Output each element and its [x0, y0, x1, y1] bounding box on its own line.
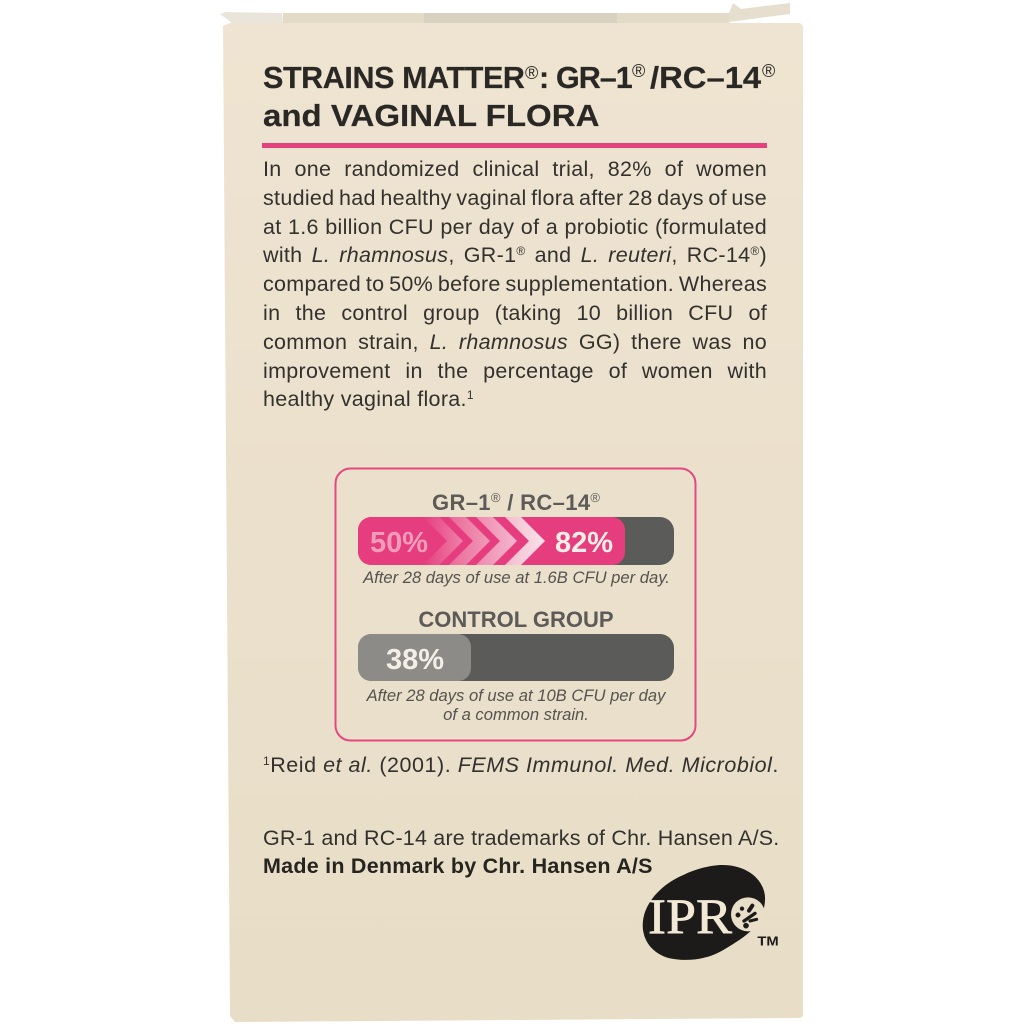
caption: GR-1 / RC-14: After 28 days of use at 1.6B CFU per day. [362, 568, 670, 587]
bar: GR-1 / RC-14 82% [358, 517, 674, 565]
caption: control group: After 28 days of use at 10B CFU per day [366, 686, 667, 705]
heading: ® [632, 61, 645, 81]
body paragraph: compared to 50% before supplementation. Whereas [263, 272, 767, 296]
body paragraph: at 1.6 billion CFU per day of a probiotic (formulated [263, 215, 767, 239]
body paragraph: with L. rhamnosus, GR-1® and L. reuteri, RC-14®) [263, 243, 767, 267]
body paragraph: studied had healthy vaginal flora after 28 days of use [263, 186, 767, 210]
heading: : [539, 61, 549, 95]
heading: /RC–14 [650, 61, 761, 95]
body paragraph [263, 157, 767, 411]
label: GR-1 / RC-14: ® [491, 490, 501, 505]
heading: and VAGINAL FLORA [263, 99, 599, 133]
caption: control group: of a common strain. [443, 705, 589, 724]
label: GR-1 / RC-14: / RC–14 [501, 490, 591, 515]
footnote reference: 1Reid et al. (2001). FEMS Immunol. Med. Microbiol. [263, 753, 779, 777]
made in Denmark note: Made in Denmark by Chr. Hansen A/S [263, 854, 653, 878]
label: GR-1 / RC-14: ® [590, 490, 600, 505]
trademark note: GR-1 and RC-14 are trademarks of Chr. Hansen A/S. [263, 826, 779, 850]
heading: ® [525, 63, 538, 83]
bar: control group 38%: 38% [386, 644, 444, 676]
bar: control group 38% [358, 634, 674, 681]
label: control group: CONTROL GROUP [418, 607, 614, 632]
heading: ® [762, 61, 775, 81]
bar: GR-1 / RC-14 82%: 82% [555, 527, 613, 559]
heading: GR–1 [556, 61, 632, 95]
icon: IPRO logo: IPR [648, 888, 733, 944]
body paragraph: In one randomized clinical trial, 82% of women [263, 157, 767, 181]
chevrons from 50% to 82% [423, 517, 545, 565]
body paragraph: in the control group (taking 10 billion CFU of [263, 301, 767, 325]
pink heading rule [262, 143, 767, 148]
label: GR-1 / RC-14: GR–1 [432, 490, 491, 515]
heading [263, 61, 775, 133]
bar: GR-1 / RC-14 82%: 50% [370, 527, 428, 559]
heading: STRAINS MATTER [263, 61, 525, 95]
body paragraph: improvement in the percentage of women with [263, 359, 767, 383]
icon: IPRO logo: TM [757, 934, 779, 948]
body paragraph: healthy vaginal flora.1 [263, 387, 474, 411]
body paragraph: common strain, L. rhamnosus GG) there was no [263, 330, 767, 354]
